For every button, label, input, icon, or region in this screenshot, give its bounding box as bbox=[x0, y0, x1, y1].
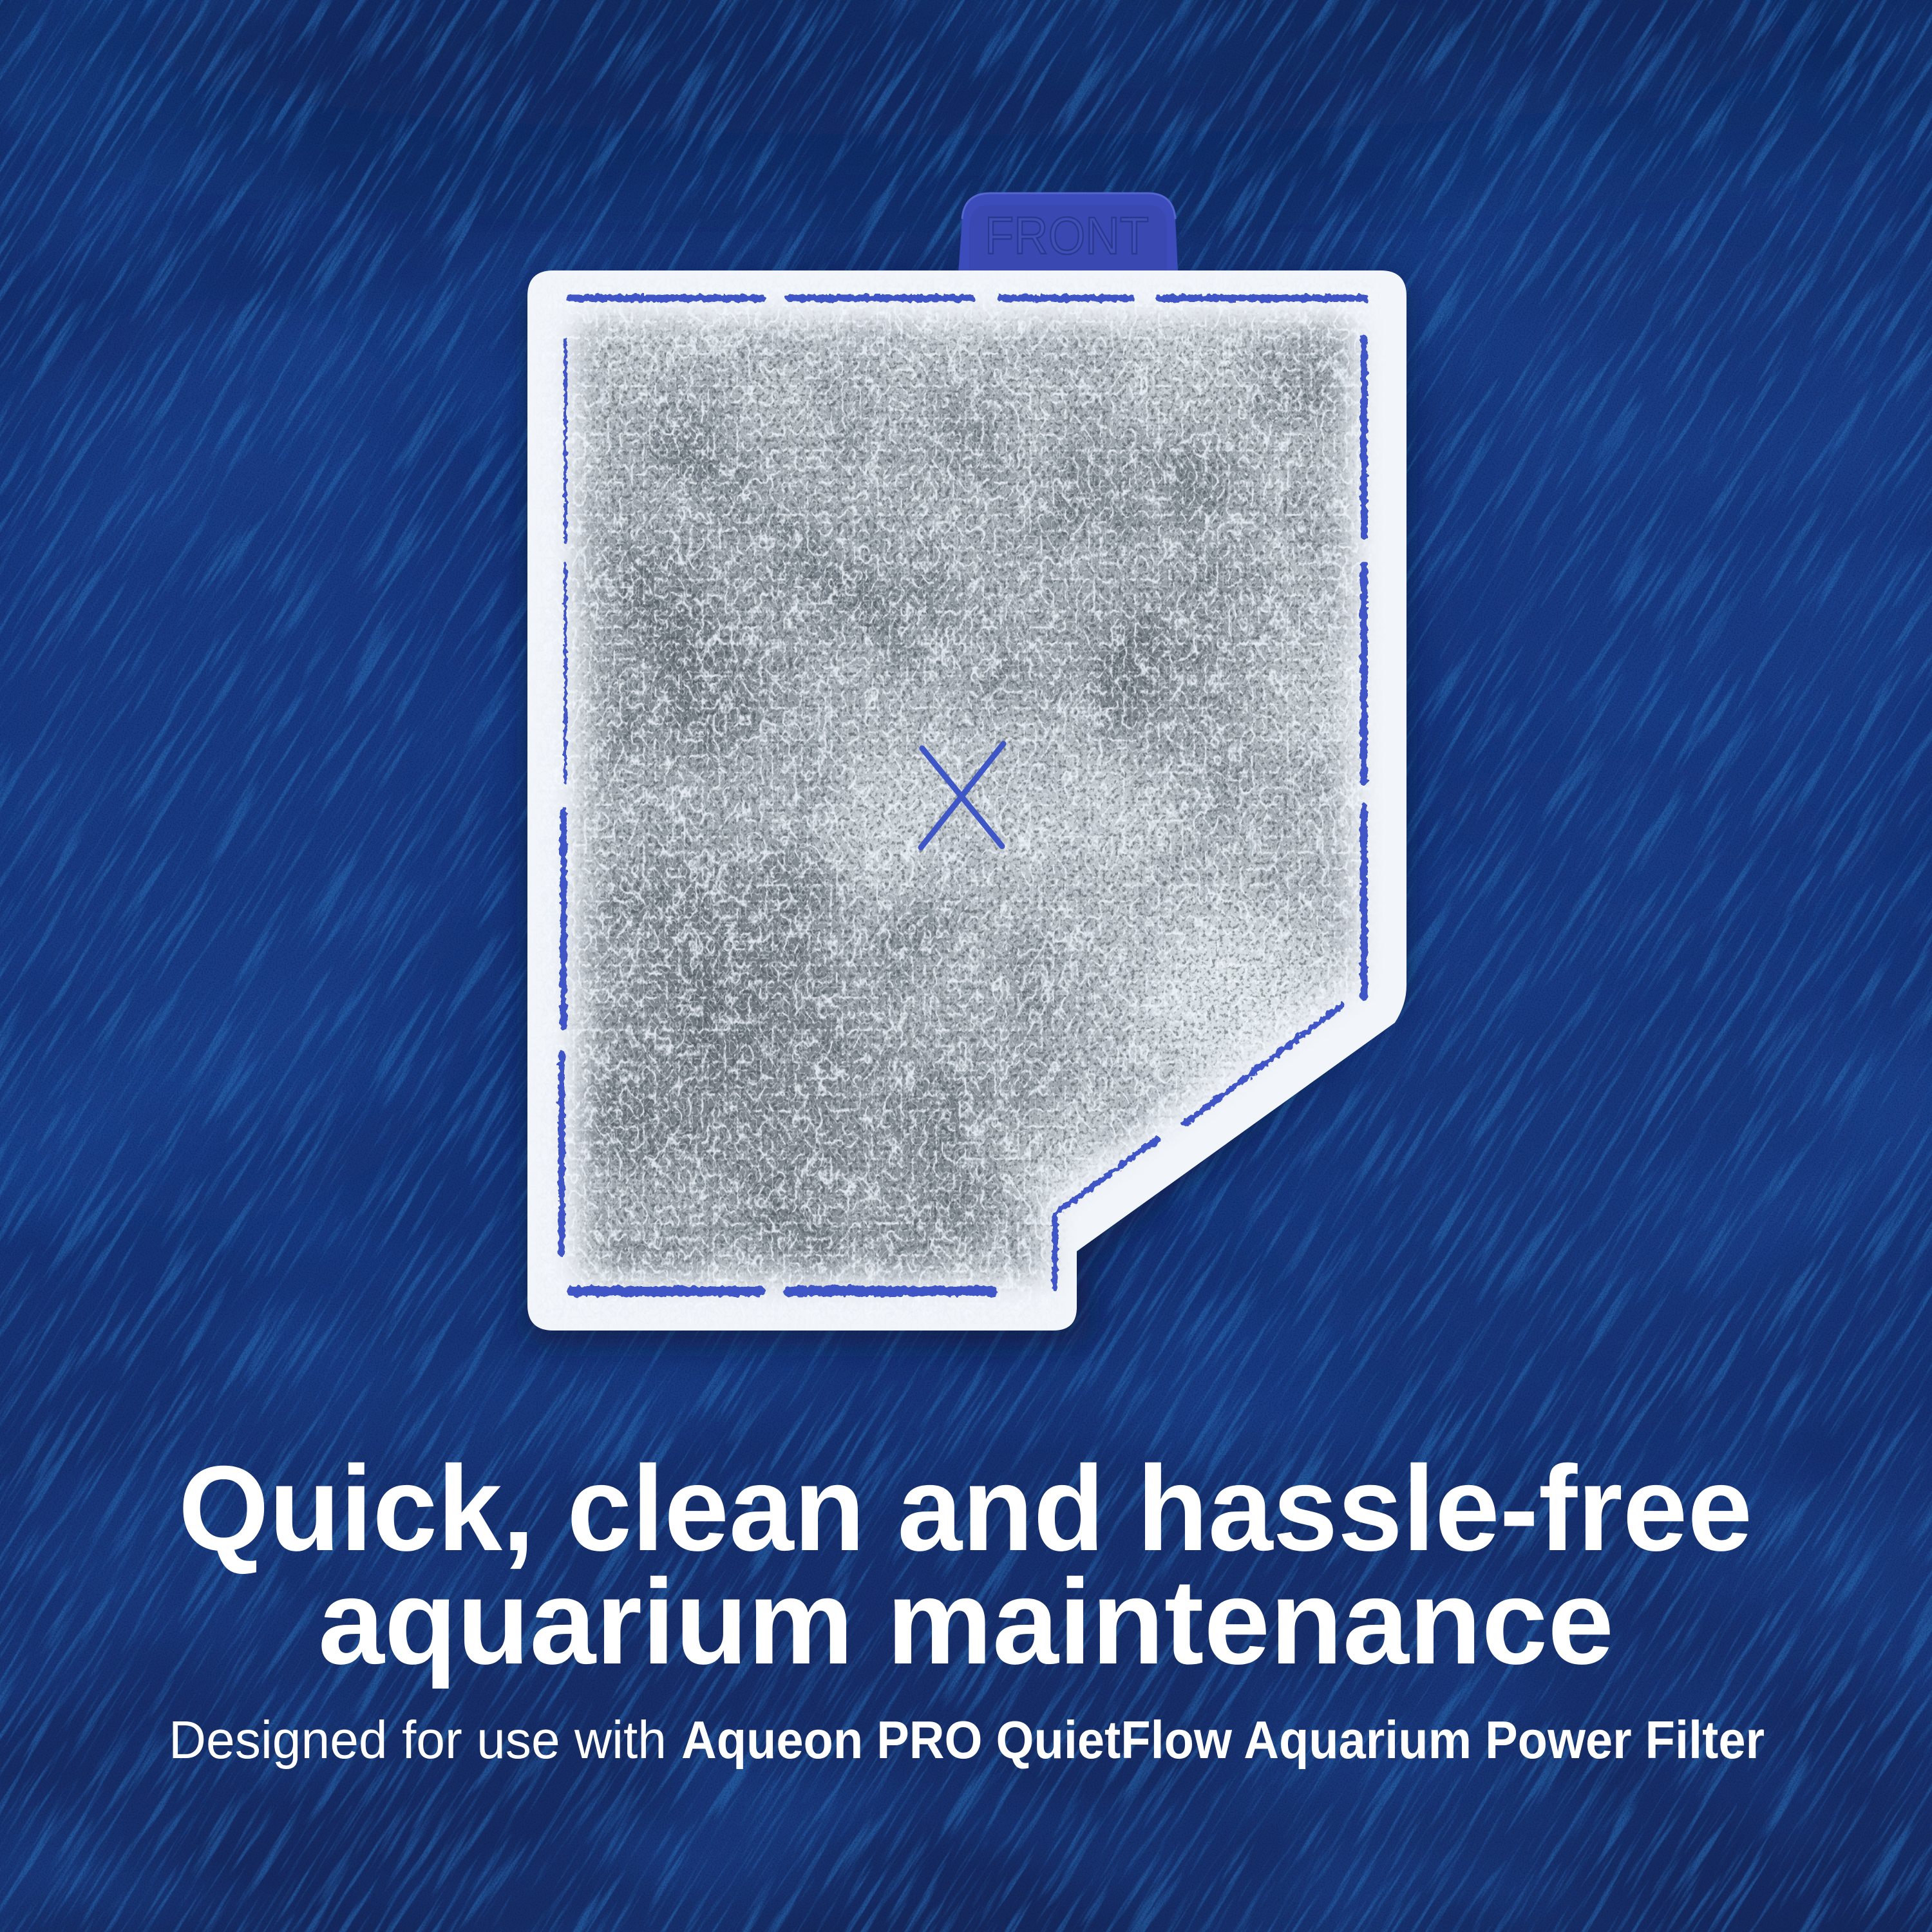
grey carbon fibre media bbox=[515, 258, 1417, 1340]
headline line 2: aquarium maintenance bbox=[318, 1554, 1614, 1689]
subtitle regular part: Designed for use with bbox=[169, 1710, 667, 1770]
dark patches in media bbox=[605, 541, 1243, 1236]
drop shadow under filter pad bbox=[527, 283, 1406, 1346]
subtitle bold part: Aqueon PRO QuietFlow Aquarium Power Filter bbox=[681, 1710, 1765, 1770]
headline bbox=[178, 1441, 1752, 1689]
blue FRONT tab bbox=[958, 193, 1179, 283]
white pad frame bbox=[527, 270, 1406, 1331]
light patches in media bbox=[567, 316, 1365, 1314]
subtitle bbox=[169, 1710, 1765, 1770]
headline line 1: Quick, clean and hassle-free bbox=[178, 1441, 1752, 1576]
blue FRONT tab: FRONT bbox=[985, 207, 1149, 265]
filter pad product bbox=[515, 193, 1417, 1346]
blue X centre mark bbox=[921, 744, 1003, 848]
blue stitched dashes around pad edge bbox=[562, 298, 1365, 1291]
